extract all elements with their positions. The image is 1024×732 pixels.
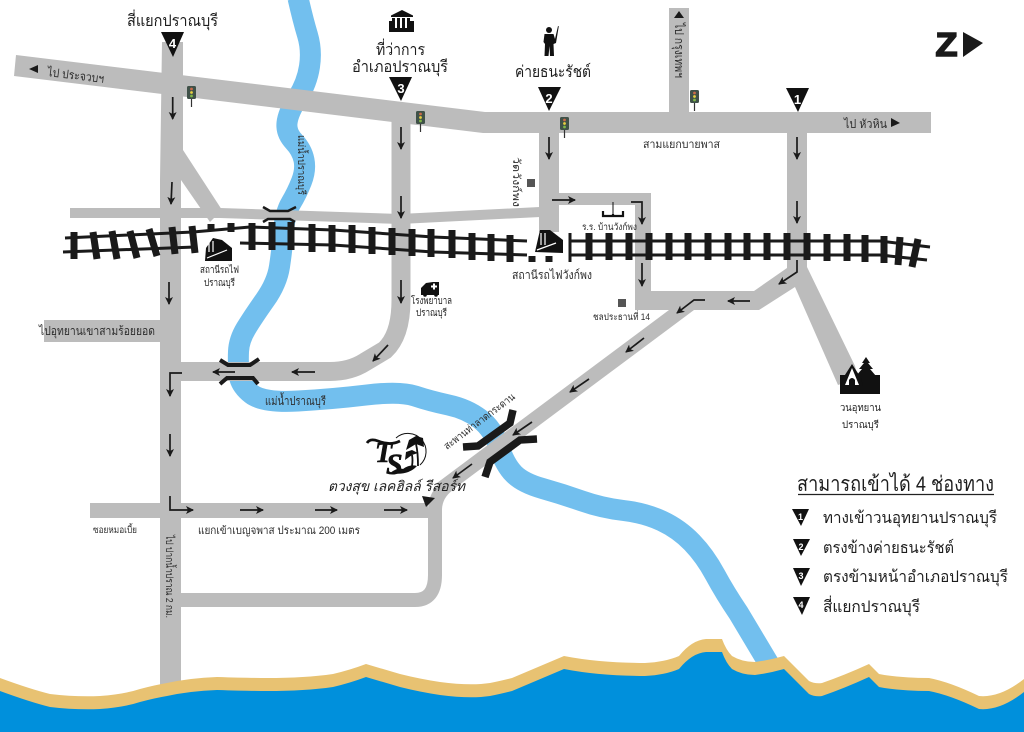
marker 4: 4 <box>169 36 177 51</box>
label: hospital: ปราณบุรี <box>416 307 447 319</box>
legend item 3: ตรงข้ามหน้าอำเภอปราณบุรี <box>823 568 1008 587</box>
direction arrows <box>169 97 797 510</box>
icon: school <box>603 202 623 216</box>
resort loop road <box>175 485 448 600</box>
legend item 2: ตรงข้างค่ายธนะรัชต์ <box>823 538 954 557</box>
marker 2 <box>538 87 561 111</box>
legend item 2: 2 <box>798 542 804 552</box>
label: soi mo bia: ซอยหมอเบี้ย <box>93 523 137 536</box>
traffic light 3 <box>416 111 425 132</box>
label: school: ร.ร. บ้านวังก์พง <box>582 221 637 233</box>
destination marker <box>422 496 435 507</box>
label: bencha pass note: แยกเข้าเบญจพาส ประมาณ 200 เมตร <box>198 525 360 537</box>
label: to Bangkok: ไป กรุงเทพฯ <box>671 22 686 78</box>
road at junction 2 <box>437 122 858 497</box>
traffic light bypass <box>690 90 699 111</box>
label: national park <box>840 403 881 431</box>
marker 4 <box>161 32 184 57</box>
bridges <box>220 207 537 477</box>
logo: resort: T <box>375 438 394 469</box>
legend item 4 <box>793 595 920 617</box>
legend item 3: 3 <box>798 571 804 581</box>
legend item 1: ทางเข้าวนอุทยานปราณบุรี <box>823 509 997 528</box>
legend <box>792 472 1008 617</box>
sea <box>0 652 1024 732</box>
legend item 2 <box>793 538 954 557</box>
marker 2: 2 <box>545 91 553 106</box>
icon: ambulance <box>421 282 439 297</box>
label: hospital <box>411 294 452 319</box>
label: Pranburi station: ปราณบุรี <box>204 277 235 289</box>
label: national park: ปราณบุรี <box>842 419 880 431</box>
river bridge on road 3 <box>220 359 259 384</box>
label: national park: วนอุทยาน <box>840 403 881 414</box>
label: Pranburi river: แม่น้ำปราณบุรี <box>265 392 326 409</box>
icon: Wang Phong station <box>535 230 563 253</box>
road at junction 3 <box>170 120 401 372</box>
label: bypass junction: สามแยกบายพาส <box>643 139 720 151</box>
resort road <box>90 503 428 518</box>
logo: resort <box>367 433 426 481</box>
marker 1: 1 <box>794 92 801 107</box>
road north to Bangkok <box>669 8 689 118</box>
label: to Sam Roi Yot: ไปอุทยานเขาสามร้อยยอด <box>38 324 155 339</box>
label: Pranburi station <box>200 264 239 289</box>
legend item 1: 1 <box>798 512 803 522</box>
label: district office: อำเภอปราณบุรี <box>352 58 448 77</box>
label: district office <box>352 38 448 77</box>
logo: resort: S <box>386 448 403 481</box>
small railway bridge <box>263 207 296 222</box>
label: Pranburi station: สถานีรถไฟ <box>200 264 239 276</box>
label: river vertical: แม่น้ำปราณบุรี <box>295 135 309 195</box>
legend item 4: สี่แยกปราณบุรี <box>823 595 920 617</box>
road at junction 4 <box>160 42 222 685</box>
label: to Hua Hin: ไป หัวหิน <box>843 117 887 131</box>
label: Wang Phong station: สถานีรถไฟวังก์พง <box>512 268 592 282</box>
label: district office: ที่ว่าการ <box>376 38 425 59</box>
label: temple vertical: วัดวังก์พง <box>510 157 523 207</box>
icon: north arrow: Z <box>936 26 958 63</box>
label: to Bangkok <box>671 11 686 78</box>
Tha Lat Kradan bridge <box>463 410 537 477</box>
icon: district office <box>389 10 414 32</box>
sand beach <box>0 639 1024 732</box>
label: junction 4: สี่แยกปราณบุรี <box>127 9 218 31</box>
legend item 4: 4 <box>798 600 804 610</box>
railway <box>63 222 930 267</box>
label: hospital: โรงพยาบาล <box>411 294 452 307</box>
marker 1 <box>786 88 809 112</box>
label: to Pak Nam Pran: ไป ปากน้ำปราณ 2 กม. <box>163 534 177 618</box>
river <box>238 0 769 664</box>
side road to national park <box>44 320 162 342</box>
label: to Prachuap <box>29 65 105 86</box>
label: Tha Lat Kradan bridge: สะพานท่าลาดกระดาน <box>442 391 517 452</box>
label: irrigation: ชลประธานที่ 14 <box>593 310 650 323</box>
crossing road along railway <box>70 212 540 219</box>
main highway <box>14 55 931 133</box>
label: army camp: ค่ายธนะรัชต์ <box>515 62 591 81</box>
label: resort name: ตวงสุข เลคฮิลล์ รีสอร์ท <box>328 478 467 495</box>
traffic light 4 <box>187 86 196 107</box>
traffic light 2 <box>560 117 569 138</box>
legend heading: สามารถเข้าได้ 4 ช่องทาง <box>797 472 994 496</box>
marker 3 <box>389 77 412 101</box>
icon: national park <box>840 357 880 394</box>
marker 3: 3 <box>397 81 405 96</box>
icon: north arrow <box>936 26 983 63</box>
icon: square landmark irrigation <box>618 299 626 307</box>
icon: Pranburi station <box>205 238 232 261</box>
label: to Prachuap: ไป ประจวบฯ <box>46 65 105 86</box>
icon: square landmark temple <box>527 179 535 187</box>
icon: soldier <box>544 26 559 56</box>
